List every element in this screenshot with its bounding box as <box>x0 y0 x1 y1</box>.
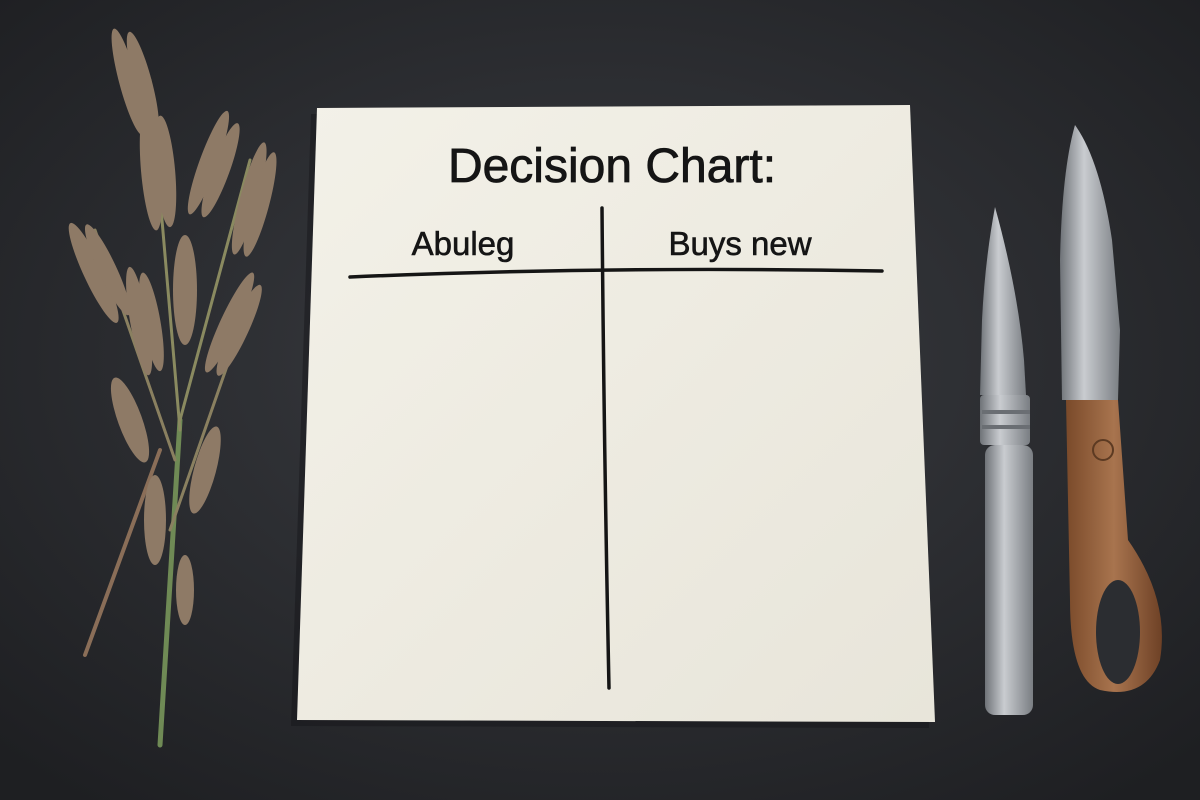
title: Decision Chart: <box>448 140 776 193</box>
icon: wooden-handled knife <box>1060 125 1162 692</box>
column heading: Buys new: Buys new <box>668 225 812 262</box>
column heading: Abuleg: Abuleg <box>412 225 514 262</box>
icon: dried grass stalk <box>61 23 285 745</box>
chart lines <box>350 208 882 688</box>
icon: steel knife <box>980 207 1033 715</box>
panel: paper sheet <box>291 105 935 728</box>
